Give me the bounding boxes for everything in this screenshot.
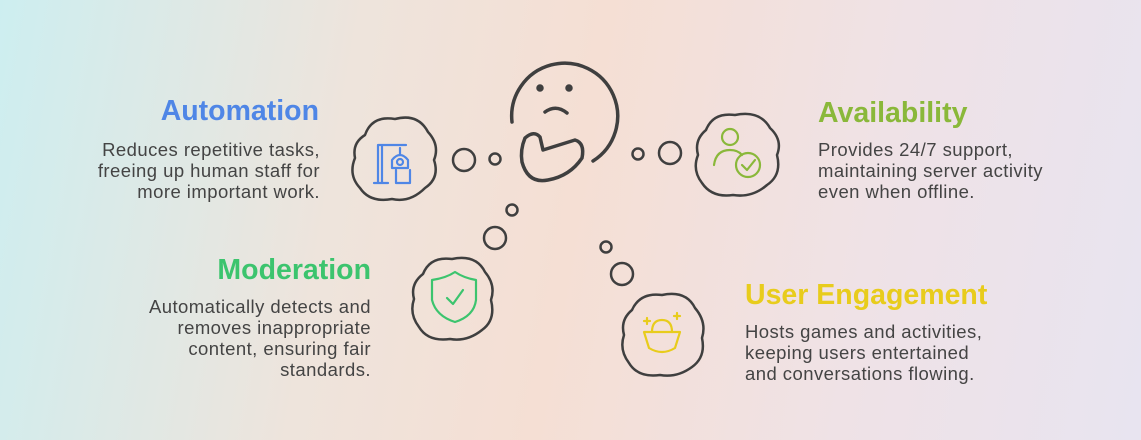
heading: availability: Availability — [818, 97, 967, 129]
icon: robot arm — [374, 145, 410, 183]
text: moderation: Automatically detects and — [149, 296, 371, 317]
text: user engagement: Hosts games and activities, — [745, 321, 982, 342]
text: automation: freeing up human staff for — [98, 160, 320, 181]
icon: gold ingot — [644, 313, 680, 352]
text: moderation: removes inappropriate — [177, 317, 371, 338]
cloud: automation — [352, 118, 436, 200]
cloud: availability — [696, 114, 779, 196]
text: availability: even when offline. — [818, 181, 975, 202]
cloud: user engagement — [622, 294, 703, 376]
text: user engagement: and conversations flowing. — [745, 363, 975, 384]
heading: automation: Automation — [161, 95, 319, 127]
icon: thinking face — [512, 63, 618, 181]
text: moderation: content, ensuring fair — [188, 338, 371, 359]
text: moderation: standards. — [280, 359, 371, 380]
text: moderation — [149, 296, 371, 380]
text: automation: Reduces repetitive tasks, — [102, 139, 320, 160]
text: availability: maintaining server activity — [818, 160, 1043, 181]
text: automation: more important work. — [137, 181, 320, 202]
text: availability: Provides 24/7 support, — [818, 139, 1013, 160]
cloud: moderation — [412, 258, 493, 340]
icon: shield check — [432, 272, 476, 322]
text: availability — [818, 139, 1043, 202]
heading: user engagement: User Engagement — [745, 279, 987, 311]
text: user engagement — [745, 321, 982, 384]
bubbles — [453, 142, 681, 285]
text: automation — [98, 139, 320, 202]
heading: moderation: Moderation — [217, 254, 371, 286]
icon: support person check — [714, 129, 760, 177]
text: user engagement: keeping users entertained — [745, 342, 969, 363]
